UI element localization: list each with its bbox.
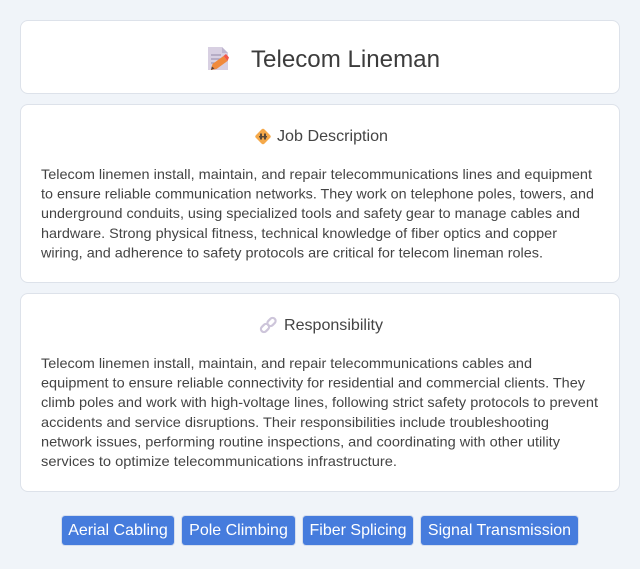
text block: responsibility: network issues, performing routine inspections, and coordinating with other utility [41,433,560,449]
tag: signal transmission: Signal Transmission [428,522,571,539]
tag: fiber splicing [303,516,413,545]
text block: responsibility: climb poles and work with high-voltage lines, following strict safety protocols to prevent [41,394,598,410]
tag: aerial cabling [62,516,174,545]
tag: signal transmission [421,516,578,545]
panel: responsibility [20,293,620,492]
heading: job description: Job Description [277,128,388,145]
icon: memo with pencil [208,47,229,70]
text block: job description: to ensure reliable communication networks. They work on telephone poles, towers, and [41,186,594,202]
text block: job description [40,166,594,260]
text block: responsibility: equipment to ensure reliable connectivity for residential and commercial clients. They [41,375,585,391]
text block: job description: wiring, and adherence to safety protocols are critical for telecom lineman roles. [40,244,543,260]
icon: link [260,317,277,333]
title: Telecom Lineman [251,46,440,73]
text block: job description: hardware. Strong physical fitness, technical knowledge of fiber optics and copper [41,225,557,241]
text block: responsibility [41,355,598,469]
text block: job description: underground conduits, using specialized tools and safety gear to manage cables and [41,205,580,221]
tag: aerial cabling: Aerial Cabling [68,522,168,539]
tag: pole climbing: Pole Climbing [189,522,288,539]
text block: responsibility: services to optimize telecommunications infrastructure. [41,453,397,469]
text block: responsibility: Telecom linemen install, maintain, and repair telecommunications cables and [41,355,532,371]
text block: responsibility: accidents and service disruptions. Their responsibilities include troubleshooting [41,414,549,430]
tag: pole climbing [182,516,295,545]
tag: fiber splicing: Fiber Splicing [310,522,406,539]
heading: responsibility: Responsibility [284,317,383,334]
text block: job description: Telecom linemen install, maintain, and repair telecommunications lines and equipment [41,166,592,182]
panel: title card [20,20,620,94]
icon: construction diamond [255,128,271,145]
panel: job description [20,104,620,283]
